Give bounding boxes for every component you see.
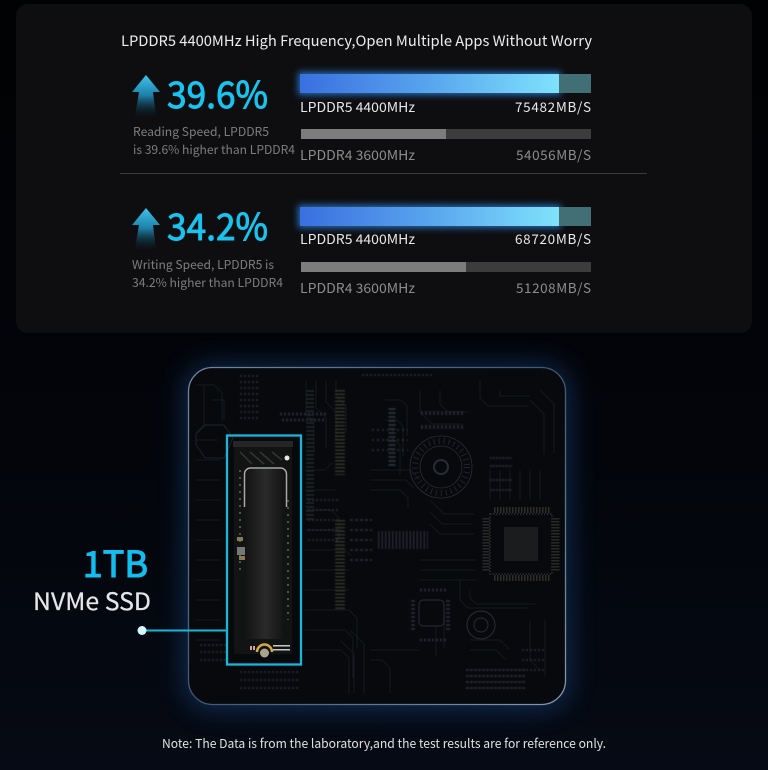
label: LPDDR4 write: LPDDR4 3600MHz <box>300 277 416 297</box>
panel: circuit board <box>188 368 566 704</box>
SSD components <box>237 537 245 560</box>
icon: octagon outline <box>196 425 233 458</box>
text: reading speed description: is 39.6% higher than LPDDR4 <box>133 140 295 158</box>
bar: LPDDR4 read <box>301 129 591 139</box>
text: reading speed description: Reading Speed, LPDDR5 <box>133 122 269 140</box>
leader dot <box>138 626 146 635</box>
SSD mounting screw <box>257 644 272 658</box>
callout: 1TB NVMe SSD <box>33 536 227 635</box>
bar: LPDDR5 read <box>298 72 591 95</box>
icon: circuit chip <box>486 510 556 578</box>
label: LPDDR4 read: LPDDR4 3600MHz <box>300 144 416 164</box>
value: 54056: 54056MB/S <box>516 144 591 164</box>
value: 51208: 51208MB/S <box>516 277 591 297</box>
bar: LPDDR5 write <box>298 205 591 228</box>
pin rows <box>200 375 546 688</box>
stat: 39.6 percent: 39.6% <box>167 66 268 119</box>
highlight frame <box>227 436 301 664</box>
stat: 34.2 percent: 34.2% <box>167 198 268 251</box>
glow behind board <box>184 364 570 710</box>
label: LPDDR5 read: LPDDR5 4400MHz <box>300 96 416 116</box>
value: 68720: 68720MB/S <box>515 228 591 248</box>
SSD module <box>233 441 293 658</box>
SSD connector <box>233 441 293 447</box>
bar: LPDDR4 write <box>301 262 591 272</box>
SSD dots <box>250 645 290 650</box>
text: 1TB: 1TB <box>83 536 148 588</box>
value: 75482: 75482MB/S <box>515 96 591 116</box>
text: writing speed description: Writing Speed, LPDDR5 is <box>132 255 274 273</box>
heading: LPDDR5 high frequency: LPDDR5 4400MHz High Frequency,Open Multiple Apps Without Worry <box>121 30 592 51</box>
SSD board details <box>240 452 288 620</box>
text: NVMe SSD: NVMe SSD <box>33 582 151 617</box>
icon: up arrow writing <box>132 208 160 249</box>
icon: circuit fan <box>410 436 472 498</box>
text: writing speed description: 34.2% higher than LPDDR4 <box>132 273 283 291</box>
leader line <box>142 630 227 632</box>
writing speed block <box>132 198 591 297</box>
icon: up arrow reading <box>132 75 160 116</box>
label: LPDDR5 write: LPDDR5 4400MHz <box>300 228 416 248</box>
panel: memory speed comparison <box>16 4 752 333</box>
icon: circuit ring <box>467 611 495 639</box>
SSD heatsink label <box>246 469 285 639</box>
circuit traces <box>196 380 554 694</box>
footnote: Note: The Data is from the laboratory,and the test results are for reference only. <box>162 734 606 752</box>
icon: small chip <box>419 600 444 626</box>
reading speed block <box>132 66 591 164</box>
